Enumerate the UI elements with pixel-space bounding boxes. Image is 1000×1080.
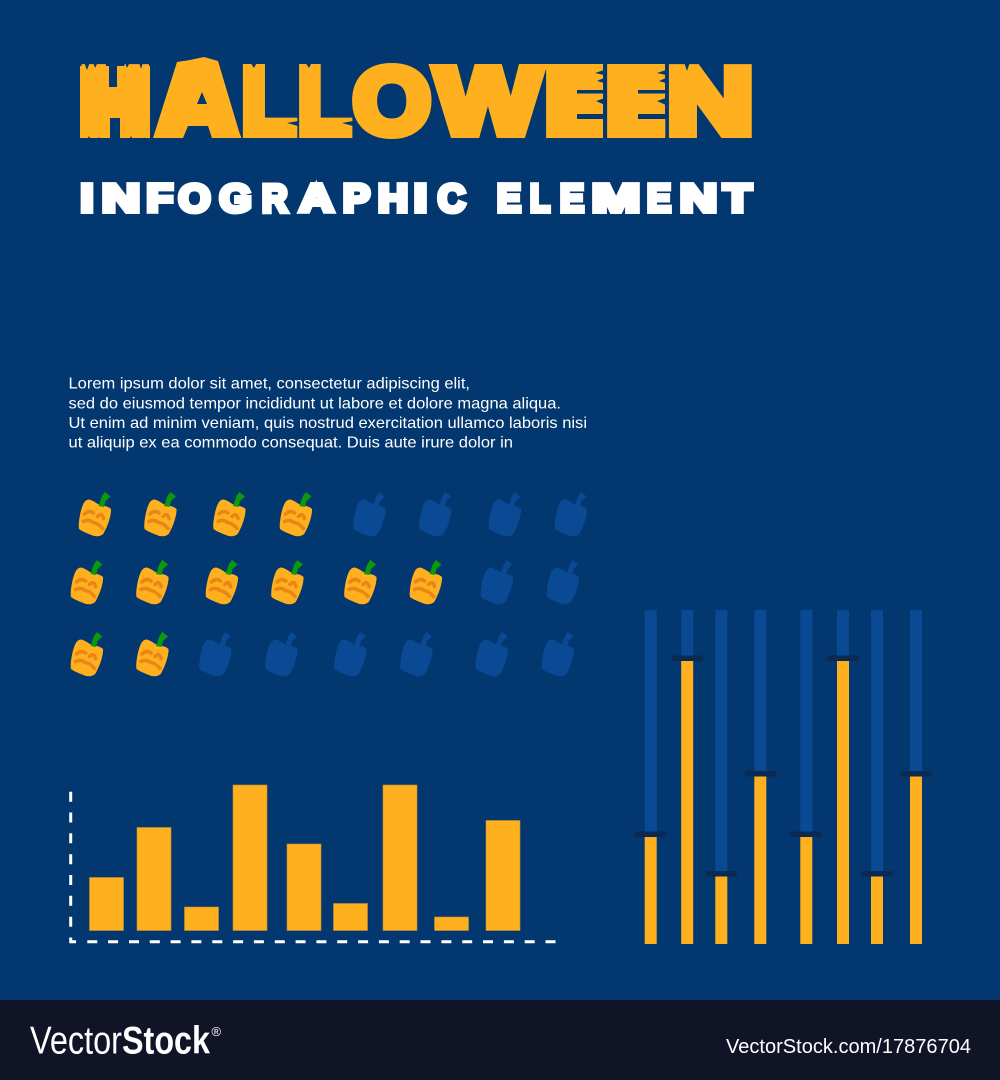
dashed axes	[71, 792, 555, 942]
subtitle: INFOGRAPHIC ELEMENT: O	[178, 178, 210, 220]
footer logo: Vector	[30, 1020, 122, 1062]
slider tracks	[645, 610, 922, 873]
subtitle: INFOGRAPHIC ELEMENT: E	[647, 178, 671, 220]
subtitle: INFOGRAPHIC ELEMENT: M	[592, 178, 640, 220]
subtitle: INFOGRAPHIC ELEMENT: G	[220, 178, 252, 220]
title: HALLOWEEN: L	[242, 49, 295, 153]
subtitle: INFOGRAPHIC ELEMENT: H	[378, 178, 408, 220]
subtitle: INFOGRAPHIC ELEMENT: E	[560, 178, 584, 220]
subtitle: INFOGRAPHIC ELEMENT: T	[724, 178, 752, 220]
title: HALLOWEEN: W	[436, 49, 540, 153]
body text: ut aliquip ex ea commodo consequat. Duis aute irure dolor in	[68, 434, 513, 452]
subtitle: INFOGRAPHIC ELEMENT: N	[102, 178, 140, 220]
title: HALLOWEEN: N	[667, 49, 753, 153]
subtitle: INFOGRAPHIC ELEMENT: I	[414, 178, 427, 220]
subtitle: INFOGRAPHIC ELEMENT: P	[343, 178, 370, 220]
subtitle: INFOGRAPHIC ELEMENT: C	[438, 178, 465, 220]
row 3: 2 of 8	[71, 632, 574, 676]
title: HALLOWEEN: E	[545, 49, 602, 153]
registered mark: ®	[212, 1024, 222, 1039]
body text: Ut enim ad minim veniam, quis nostrud exercitation ullamco laboris nisi	[68, 415, 587, 432]
title: HALLOWEEN: O	[353, 49, 430, 153]
subtitle: INFOGRAPHIC ELEMENT: I	[80, 178, 94, 220]
slider fills	[645, 661, 922, 944]
body text: Lorem ipsum dolor sit amet, consectetur adipiscing elit,	[68, 376, 470, 392]
footer band	[0, 1000, 1000, 1080]
title: HALLOWEEN: L	[298, 49, 350, 153]
footer id: VectorStock.com/17876704	[726, 1036, 971, 1058]
row 2: 6 of 8	[71, 560, 579, 604]
bars	[90, 785, 520, 930]
pumpkin rating rows	[71, 492, 587, 676]
title: HALLOWEEN: A	[158, 49, 236, 153]
body text	[68, 376, 587, 452]
subtitle: INFOGRAPHIC ELEMENT: R	[262, 178, 288, 220]
subtitle: INFOGRAPHIC ELEMENT: E	[497, 178, 521, 220]
subtitle: INFOGRAPHIC ELEMENT: A	[300, 178, 334, 220]
title: HALLOWEEN: H	[80, 49, 150, 153]
slider handles	[634, 656, 932, 876]
subtitle: INFOGRAPHIC ELEMENT: L	[530, 178, 550, 220]
subtitle: INFOGRAPHIC ELEMENT: F	[146, 178, 173, 220]
title: HALLOWEEN: E	[606, 49, 664, 153]
row 1: 4 of 8	[79, 492, 587, 536]
slider chart	[634, 610, 932, 944]
bar chart	[71, 785, 555, 942]
body text: sed do eiusmod tempor incididunt ut labore et dolore magna aliqua.	[68, 396, 561, 412]
footer logo: Stock	[122, 1020, 210, 1062]
subtitle: INFOGRAPHIC ELEMENT: N	[680, 178, 717, 220]
